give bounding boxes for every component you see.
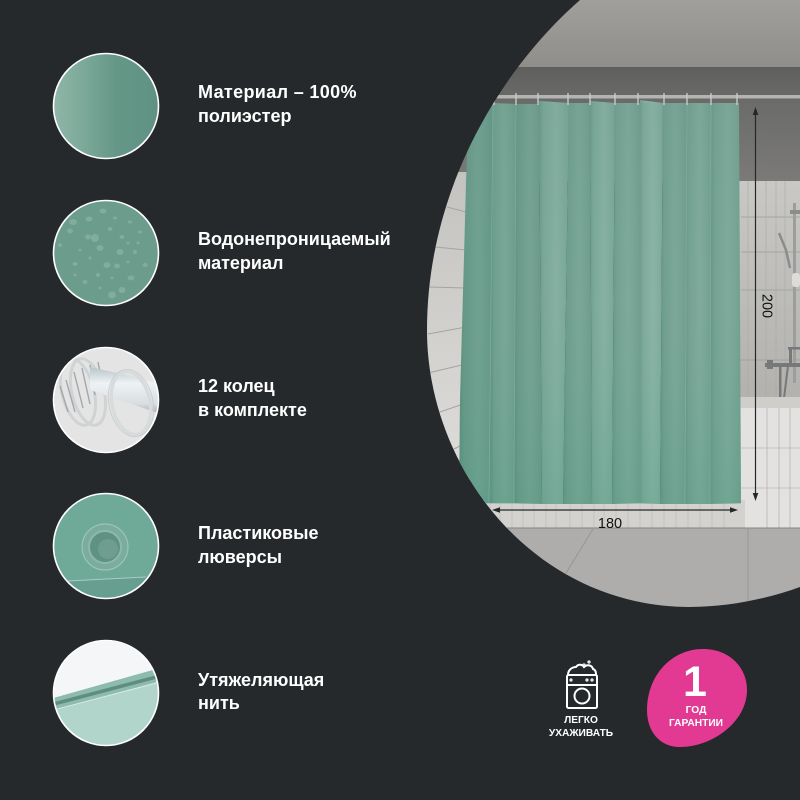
thumbnail: plastic grommet: [54, 494, 158, 600]
text: rings: в комплекте: [198, 400, 307, 420]
right tiled wall: [739, 181, 800, 397]
text: weighted thread: нить: [198, 693, 240, 713]
feature: material: [54, 54, 357, 158]
curtain rod: [490, 95, 800, 98]
warranty number: 1: [683, 658, 707, 706]
bathtub: [740, 397, 800, 528]
dimension: width 180: [492, 507, 738, 532]
text: material: Материал – 100%: [198, 82, 357, 102]
panel: bathroom photo with curtain: [420, 0, 800, 613]
text: material: полиэстер: [198, 106, 291, 126]
thumbnail: rod with clear rings: [54, 348, 160, 452]
text: waterproof: Водонепроницаемый: [198, 229, 391, 249]
text: grommets: люверсы: [198, 547, 282, 567]
warranty text: ГАРАНТИИ: [669, 718, 723, 729]
text: grommets: Пластиковые: [198, 523, 318, 543]
feature: rings: [54, 348, 307, 452]
dimension: width 180: 180: [598, 516, 622, 532]
feature: grommets: [54, 494, 318, 600]
icon: washing machine: [567, 661, 597, 708]
text: easy care: ЛЕГКО: [564, 715, 598, 726]
upper wall band: [420, 67, 800, 182]
thumbnail: fabric: [54, 54, 158, 158]
dimension: height 200: [753, 107, 774, 501]
badge: 1 year warranty: [647, 649, 747, 747]
ceiling: [518, 0, 800, 67]
feature: weighted thread: [50, 640, 324, 750]
text: rings: 12 колец: [198, 376, 275, 396]
left tiled wall: [427, 172, 470, 480]
floor: [506, 528, 800, 607]
lower wall strip under curtain: [483, 500, 745, 528]
warranty text: ГОД: [686, 705, 707, 716]
faucet: [765, 347, 800, 398]
feature: waterproof: [54, 200, 391, 306]
curtain: [459, 100, 741, 504]
thumbnail: water drops: [54, 200, 158, 306]
curtain rings: [494, 93, 737, 105]
text: easy care: УХАЖИВАТЬ: [549, 728, 613, 739]
badge: easy care: [549, 661, 613, 739]
text: weighted thread: Утяжеляющая: [198, 670, 324, 690]
dimension: height 200: 200: [758, 294, 774, 318]
thumbnail: hem thread: [50, 640, 160, 750]
pink blob: [647, 649, 747, 747]
shower rail and head: [779, 203, 800, 383]
text: waterproof: материал: [198, 253, 283, 273]
